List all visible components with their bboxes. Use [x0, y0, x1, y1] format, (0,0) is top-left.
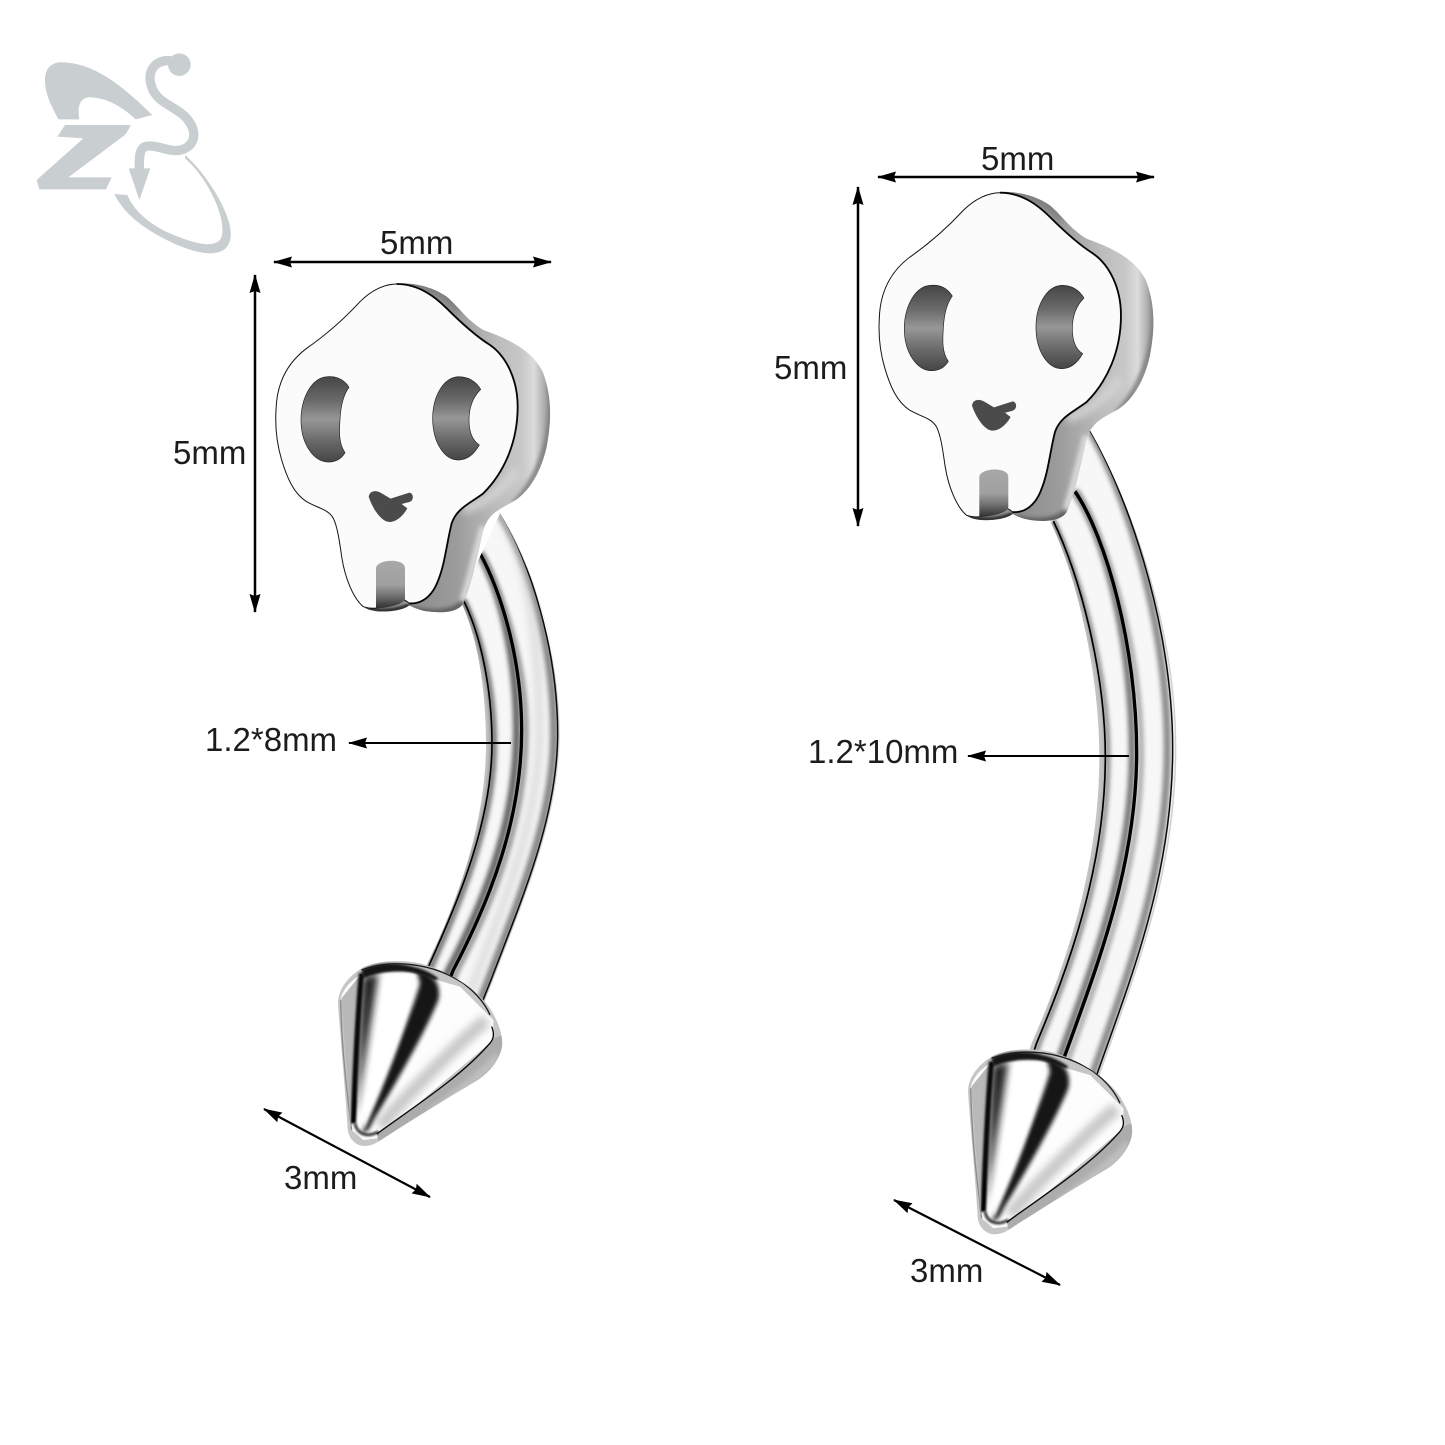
right curved bar	[1030, 430, 1176, 1076]
dimension: left head width 5mm: 5mm	[380, 224, 453, 261]
left skull head	[276, 282, 551, 612]
dimension: left head height 5mm: 5mm	[173, 434, 246, 471]
left curved bar	[426, 514, 560, 1002]
dimension: left cone 3mm	[264, 1109, 430, 1197]
dimension: right bar 1.2*10mm: 1.2*10mm	[808, 733, 958, 770]
left barbell: 1.2*8mm	[276, 282, 562, 1147]
dimension: right cone 3mm: 3mm	[910, 1252, 983, 1289]
right skull head	[879, 191, 1155, 521]
dimension: right head height 5mm: 5mm	[774, 349, 847, 386]
dimension: left cone 3mm: 3mm	[284, 1159, 357, 1196]
dimension: right cone 3mm	[894, 1200, 1060, 1289]
left spike cone	[338, 961, 507, 1147]
dimension: left bar 1.2*8mm: 1.2*8mm	[205, 721, 337, 758]
logo: ZS watermark	[37, 53, 231, 253]
right spike cone	[968, 1049, 1137, 1235]
right barbell: 1.2*10mm	[879, 191, 1177, 1235]
dimension: right head width 5mm: 5mm	[981, 140, 1054, 177]
